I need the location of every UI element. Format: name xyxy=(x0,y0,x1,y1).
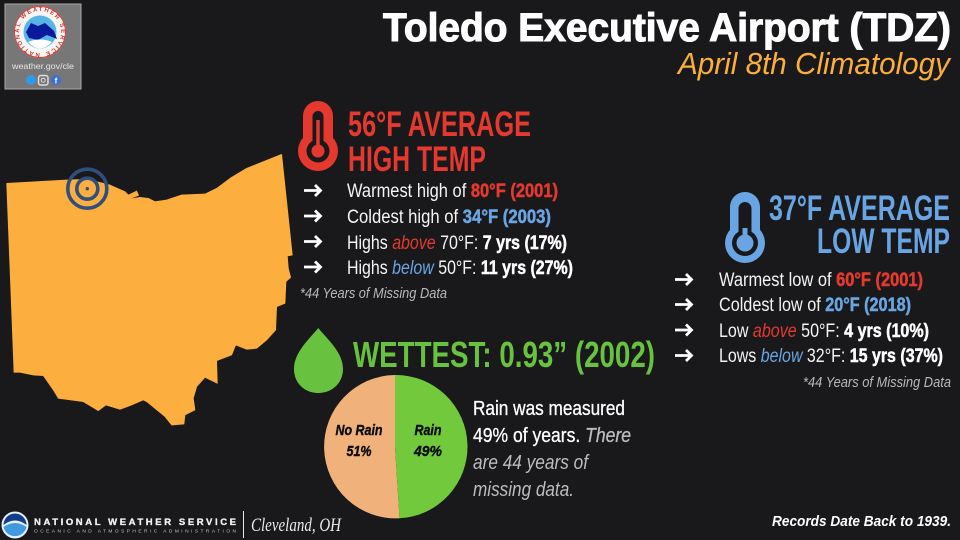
pie chart: rain vs no rain: 51% xyxy=(346,443,372,460)
text: National Weather Service xyxy=(34,517,237,534)
icon: green water drop xyxy=(294,328,343,393)
heading: 56°F average high temp xyxy=(348,105,531,179)
list: high temp facts: Warmest high of 80°F (2001) xyxy=(347,181,558,202)
pie chart: rain vs no rain: Rain xyxy=(414,422,442,439)
footer: NWS branding xyxy=(2,511,342,538)
text: Cleveland, OH: Cleveland, OH xyxy=(251,515,342,536)
list: low temp facts: Low above 50°F: 4 yrs (10%) xyxy=(719,321,929,342)
note: missing data: *44 Years of Missing Data xyxy=(300,285,447,302)
list: high temp facts xyxy=(304,181,573,279)
logo panel: NWS weather.gov/cle: NATIONAL WEATHER SERVICE xyxy=(15,7,65,57)
logo panel: NWS weather.gov/cle: f xyxy=(55,76,58,86)
panel: average low temp xyxy=(675,189,951,391)
icon: blue thermometer xyxy=(725,207,765,263)
list: high temp facts: Coldest high of 34°F (2003) xyxy=(347,207,551,228)
subtitle: April 8th Climatology xyxy=(676,46,952,81)
text block: rain summary: missing data. xyxy=(473,479,574,501)
panel: precipitation xyxy=(294,328,655,518)
text: National Weather Service: OCEANIC AND ATMOSPHERIC ADMINISTRATION xyxy=(34,528,237,534)
text block: rain summary: 49% of years. There xyxy=(473,425,631,447)
list: low temp facts: Coldest low of 20°F (2018) xyxy=(719,295,911,316)
text block: rain summary: are 44 years of xyxy=(473,452,590,474)
list: low temp facts xyxy=(675,270,943,367)
heading: wettest: WETTEST: 0.93” (2002) xyxy=(353,334,655,375)
pie chart: rain vs no rain xyxy=(324,375,467,518)
logo panel: NWS weather.gov/cle xyxy=(4,4,82,90)
list: high temp facts: Highs below 50°F: 11 yrs (27%) xyxy=(347,258,573,279)
list: low temp facts: Warmest low of 60°F (2001) xyxy=(719,270,923,291)
text block: rain summary: Rain was measured xyxy=(473,398,625,420)
logo panel: NWS weather.gov/cle: weather.gov/cle xyxy=(11,61,74,71)
heading: 56°F average high temp: HIGH TEMP xyxy=(348,140,486,179)
list: high temp facts: Highs above 70°F: 7 yrs (17%) xyxy=(347,233,567,254)
title: Toledo Executive Airport (TDZ) xyxy=(383,6,951,50)
pie chart: rain vs no rain: 49% xyxy=(413,443,442,460)
panel: average high temp xyxy=(298,105,573,302)
text block: rain summary xyxy=(473,398,631,501)
icon: red thermometer xyxy=(298,116,338,171)
list: low temp facts: Lows below 32°F: 15 yrs (37%) xyxy=(719,346,943,367)
heading: 37°F average low temp xyxy=(769,189,950,261)
text: National Weather Service: NATIONAL WEATHER SERVICE xyxy=(34,517,236,528)
heading: 56°F average high temp: 56°F AVERAGE xyxy=(348,105,531,144)
icon: NOAA logo xyxy=(2,512,28,538)
map: Ohio with location target xyxy=(7,154,292,425)
pie chart: rain vs no rain: No Rain xyxy=(336,422,382,439)
